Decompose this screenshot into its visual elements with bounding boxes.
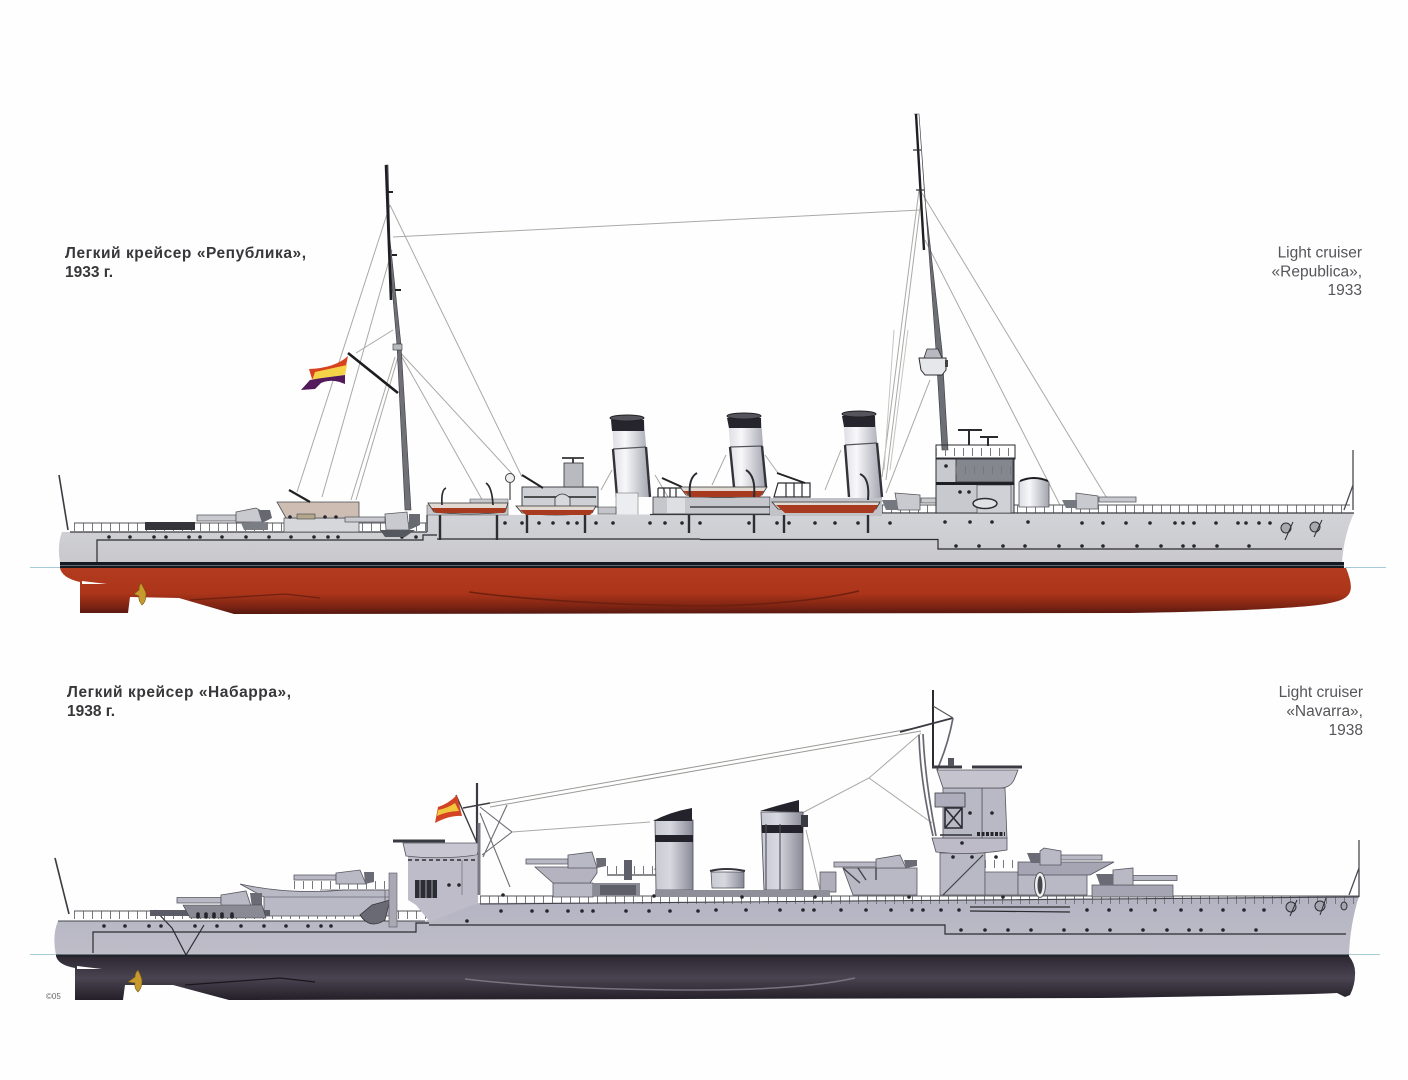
rails [70, 505, 1354, 532]
crow's nest [919, 358, 946, 375]
hull lower, dark [56, 956, 1355, 1000]
icon: anchors [1281, 520, 1322, 540]
caption: Republica, English [1272, 244, 1362, 299]
bow staff [1349, 840, 1359, 897]
gaff [348, 353, 398, 393]
aft deckhouse [277, 490, 359, 532]
icon: propeller [134, 583, 146, 605]
rigging [297, 190, 1108, 505]
boot topping [60, 562, 1344, 568]
bow staff [1344, 450, 1353, 510]
caption: Navarra, Russian [67, 684, 291, 720]
caption: Republica, Russian [65, 245, 306, 281]
gun: fore 6 [1092, 868, 1177, 897]
caption: Republica, English: 1933 [1328, 282, 1362, 299]
caption: Navarra, English: Light cruiser [1279, 684, 1363, 701]
gun: fore 2 [1062, 493, 1136, 509]
forward bridge [936, 430, 1015, 513]
davit posts [440, 497, 868, 540]
fore mast [913, 114, 948, 450]
bilge keel [469, 591, 859, 606]
icon: propeller [128, 970, 142, 992]
gun: midship 4 [834, 855, 917, 895]
boats and midship deckhouse [427, 458, 882, 515]
waterline [30, 566, 1386, 568]
rudder gap [77, 966, 102, 969]
caption: Navarra, Russian: 1938 г. [67, 703, 115, 720]
copyright mark: ©05 [46, 992, 61, 1001]
rudder gap [82, 581, 107, 584]
caption: Navarra, English: «Navarra», [1286, 703, 1363, 720]
gun: fore 5 [1018, 848, 1114, 898]
icon: anchors and hawse [1286, 898, 1347, 916]
funnels [610, 411, 882, 518]
gun: midship 3 [526, 852, 660, 897]
hull upper works [59, 513, 1354, 562]
bridge tower [932, 758, 1022, 895]
hull lines [97, 515, 1342, 562]
gun: aft 1 [197, 508, 272, 530]
main mast and stays [900, 690, 953, 836]
stern staff [59, 475, 68, 530]
round deckhouse [655, 869, 836, 897]
portholes [104, 907, 1264, 930]
icon: Spanish Republic flag [301, 356, 348, 390]
hull upper works [54, 896, 1359, 955]
caption: Navarra, Russian: Легкий крейсер «Набарра», [67, 684, 291, 701]
aft deckhouse and gun mounts [150, 873, 397, 927]
waterline [30, 954, 1380, 956]
caption: Navarra, English: 1938 [1329, 722, 1363, 739]
icon: Spanish flag [435, 795, 462, 823]
caption: Republica, Russian: Легкий крейсер «Република», [65, 245, 306, 262]
hull lines [93, 907, 1346, 955]
funnels [653, 800, 808, 890]
caption: Navarra, English [1279, 684, 1363, 739]
gun: aft 2 [294, 870, 374, 884]
stern staff [55, 858, 69, 914]
gun: aft 1 [177, 891, 266, 918]
round deckhouse [1019, 478, 1049, 507]
caption: Republica, English: Light cruiser [1278, 244, 1362, 262]
small orange boats [503, 894, 1136, 897]
portholes [109, 522, 1270, 546]
hull lower, red antifouling [60, 568, 1351, 614]
caption: Republica, Russian: 1933 г. [65, 264, 113, 281]
rigging [480, 727, 932, 890]
gun: fore 1 [882, 493, 958, 510]
aft control station [393, 841, 480, 922]
ship profile: light cruiser Republica 1933 [30, 114, 1386, 614]
caption: Republica, English: «Republica», [1272, 264, 1362, 280]
ship profile: light cruiser Navarra 1938 [30, 690, 1380, 1001]
rails [58, 896, 1359, 921]
aft mast [456, 783, 490, 895]
gun: aft 2 [345, 512, 420, 537]
aft mast [386, 165, 411, 510]
bilge keel [465, 978, 855, 990]
